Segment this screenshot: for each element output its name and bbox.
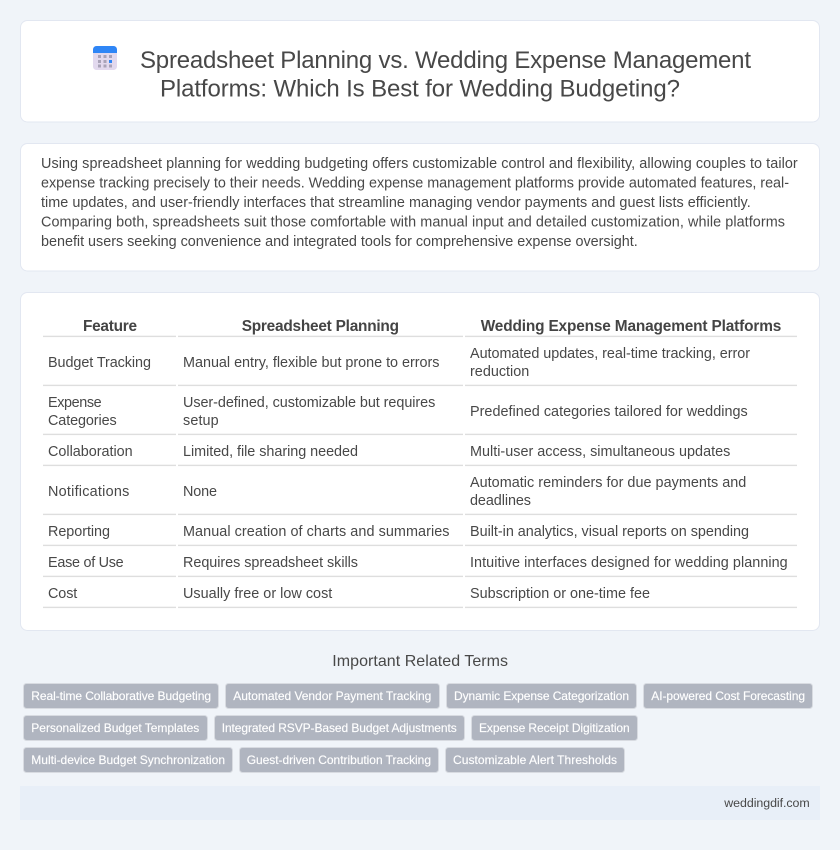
tag: customizable alert thresholds: Customizable Alert Thresholds [453,753,617,767]
row: notifications: Automatic reminders for due payments and [470,475,746,491]
tag: ai-powered cost forecasting [644,684,812,708]
row: cost: Usually free or low cost [183,586,332,602]
title: Platforms: Which Is Best for Wedding Budgeting? [160,76,680,102]
row: notifications: None [183,484,217,500]
comparison table panel [20,292,820,630]
tag: multi-device budget synchronization [24,748,232,772]
tag: ai-powered cost forecasting: AI-powered Cost Forecasting [651,689,805,703]
row: notifications [48,475,746,509]
row: cost: Subscription or one-time fee [470,586,650,602]
footer bar [20,786,820,820]
tag: integrated rsvp-based budget adjustments [214,716,464,740]
row: expense categories: User-defined, customizable but requires [183,395,435,411]
row: collaboration: Multi-user access, simultaneous updates [470,444,730,460]
tag: personalized budget templates [24,716,208,740]
related terms tags [24,684,812,772]
intro paragraph: Comparing both, spreadsheets suit those comfortable with manual input and detailed customization, while platforms [41,214,785,230]
row: budget tracking: Budget Tracking [48,355,151,371]
tag: real-time collaborative budgeting: Real-time Collaborative Budgeting [31,689,211,703]
title [140,47,751,102]
row: ease of use [48,555,788,571]
tag: automated vendor payment tracking: Automated Vendor Payment Tracking [233,689,431,703]
title: Spreadsheet Planning vs. Wedding Expense Management [140,47,751,74]
row: cost [48,586,650,602]
tag: personalized budget templates: Personalized Budget Templates [31,721,199,735]
header panel [20,20,820,122]
row: ease of use: Intuitive interfaces designed for wedding planning [470,555,788,571]
tag: guest-driven contribution tracking: Guest-driven Contribution Tracking [247,753,431,767]
intro paragraph: benefit users seeking convenience and integrated tools for comprehensive expense oversight. [41,234,638,250]
tag: customizable alert thresholds [446,748,624,772]
row: collaboration: Limited, file sharing needed [183,444,358,460]
row: expense categories: Expense [48,395,102,411]
table header: Wedding Expense Management Platforms [481,318,781,335]
row: reporting: Built-in analytics, visual reports on spending [470,524,749,540]
tag: guest-driven contribution tracking [240,748,438,772]
intro paragraph: Using spreadsheet planning for wedding budgeting offers customizable control and flexibility, allowing couples to tailor [41,156,798,172]
icon: calendar spreadsheet [93,46,117,70]
tag: automated vendor payment tracking [226,684,440,708]
tag: real-time collaborative budgeting [24,684,218,708]
row: reporting [48,524,749,540]
tag: dynamic expense categorization: Dynamic Expense Categorization [454,689,629,703]
table header: Feature [83,318,137,335]
tag: integrated rsvp-based budget adjustments: Integrated RSVP-Based Budget Adjustments [222,721,457,735]
row: reporting: Manual creation of charts and summaries [183,524,450,540]
intro paragraph: time updates, and user-friendly interfaces that streamline managing vendor payments and guest lists efficiently. [41,195,751,211]
tag: multi-device budget synchronization: Multi-device Budget Synchronization [31,753,225,767]
row: budget tracking: Automated updates, real-time tracking, error [470,346,750,362]
row: budget tracking: reduction [470,364,529,380]
row: budget tracking [48,346,750,380]
row: expense categories: Predefined categories tailored for weddings [470,404,748,420]
tag: dynamic expense categorization [446,684,636,708]
table rules [43,336,797,608]
row: collaboration: Collaboration [48,444,133,460]
row: collaboration [48,444,730,460]
row: reporting: Reporting [48,524,110,540]
row: notifications: Notifications [48,484,129,500]
tag: expense receipt digitization: Expense Receipt Digitization [479,721,630,735]
row: ease of use: Ease of Use [48,555,124,571]
intro paragraph [41,156,798,250]
table header: Spreadsheet Planning [242,318,399,335]
table header [83,318,781,335]
intro paragraph: expense tracking precisely to their needs. Wedding expense management platforms provide automated features, real- [41,176,789,192]
footer source: weddingdif.com [723,796,810,810]
row: ease of use: Requires spreadsheet skills [183,555,358,571]
intro text panel [20,144,820,271]
row: expense categories: Categories [48,413,117,429]
row: budget tracking: Manual entry, flexible but prone to errors [183,355,440,371]
tag: expense receipt digitization [472,716,638,740]
row: expense categories: setup [183,413,219,429]
row: cost: Cost [48,586,77,602]
related terms heading: Important Related Terms [332,653,508,670]
row: notifications: deadlines [470,493,531,509]
row: expense categories [48,395,748,429]
